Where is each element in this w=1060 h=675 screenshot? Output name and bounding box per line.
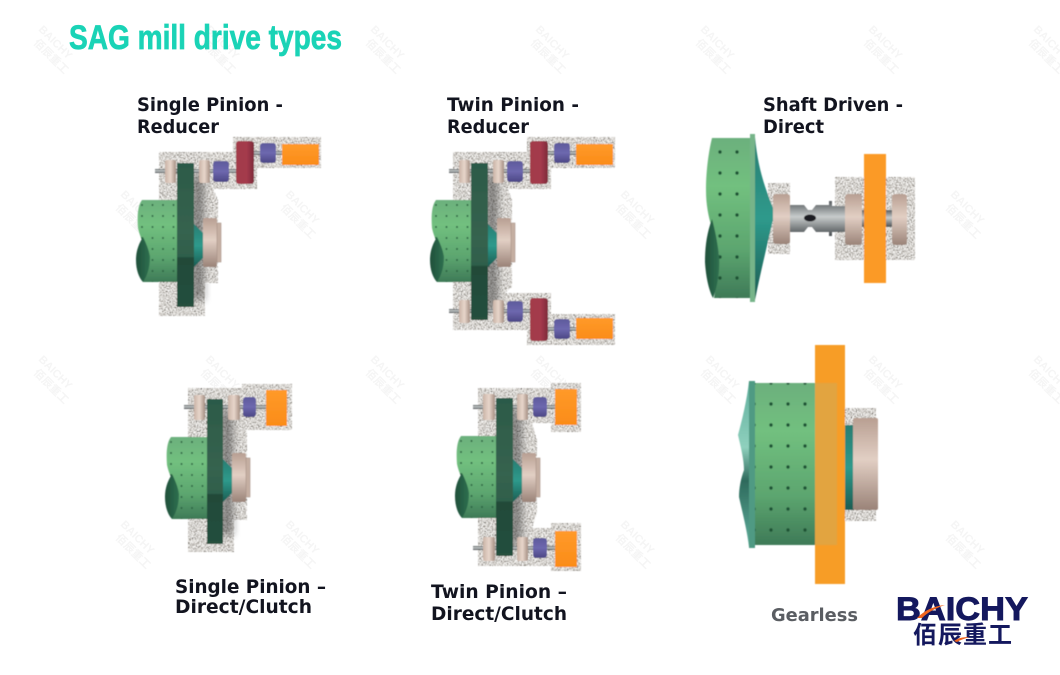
- label: twin pinion direct clutch: Direct/Clutch: [431, 603, 567, 625]
- watermark pattern: 佰辰重工: [613, 201, 654, 242]
- ring gear: [471, 163, 488, 320]
- pinion shaft: [184, 405, 268, 409]
- label: single pinion direct clutch: Single Pinion –: [175, 576, 326, 598]
- gear shadow: [221, 410, 233, 535]
- flange: [749, 381, 755, 548]
- concrete under bearing: [768, 183, 790, 254]
- pinion bearing left: [165, 160, 176, 183]
- logo chinese name: 佰辰重工: [913, 615, 1012, 650]
- mill shell: [706, 138, 750, 298]
- motor shaft: [250, 151, 284, 155]
- watermark pattern: 佰辰重工: [113, 531, 154, 572]
- label: gearless: Gearless: [771, 606, 858, 626]
- watermark pattern: BAICHY: [866, 24, 904, 62]
- trunnion and main bearing: [223, 453, 250, 502]
- coupling: [243, 397, 256, 417]
- watermark pattern: BAICHY: [36, 24, 74, 62]
- upper bearings: [459, 160, 504, 183]
- coupling: [213, 161, 229, 182]
- shell bolts: [755, 383, 838, 545]
- label: shaft driven direct: Direct: [763, 116, 824, 138]
- watermark pattern: BAICHY: [368, 354, 406, 392]
- watermark pattern: BAICHY: [203, 354, 241, 392]
- trunnion and main bearing: [194, 218, 221, 267]
- watermark pattern: BAICHY: [866, 354, 904, 392]
- motor shaft: [846, 210, 902, 227]
- label: twin pinion direct clutch: [431, 581, 567, 625]
- pinion shaft: [155, 169, 250, 173]
- lower motor shaft: [544, 327, 578, 331]
- lower pinion shaft: [473, 546, 557, 550]
- watermark pattern: 佰辰重工: [31, 366, 72, 407]
- upper motor: [555, 389, 577, 425]
- motor stator: [815, 345, 845, 584]
- shell bolts: [706, 138, 750, 298]
- watermark pattern: BAICHY: [948, 189, 986, 227]
- watermark pattern: 佰辰重工: [528, 36, 569, 77]
- concrete under motor: [835, 177, 915, 260]
- diagram: gearless: [738, 345, 878, 584]
- watermark pattern: 佰辰重工: [861, 36, 902, 77]
- coupling 2: [260, 143, 276, 163]
- diagram: shaft driven direct: [705, 134, 915, 302]
- lower bearings: [459, 300, 504, 323]
- label: twin pinion direct clutch: Twin Pinion –: [431, 581, 567, 603]
- watermark pattern: BAICHY: [698, 24, 736, 62]
- lower motor: [555, 531, 577, 567]
- diagram: single pinion direct clutch: [165, 384, 292, 552]
- label: single pinion reducer: [137, 94, 283, 138]
- couplings: [533, 397, 547, 558]
- label: shaft driven direct: [763, 94, 903, 138]
- watermark pattern: 佰辰重工: [278, 201, 319, 242]
- ring gear: [207, 399, 223, 544]
- upper pinion shaft: [449, 169, 544, 173]
- watermark pattern: BAICHY: [283, 189, 321, 227]
- watermark pattern: BAICHY: [118, 189, 156, 227]
- concrete foundation: [453, 137, 615, 345]
- motor: [266, 390, 287, 426]
- upper couplings: [507, 143, 570, 182]
- watermark pattern: 佰辰重工: [31, 36, 72, 77]
- label: single pinion direct clutch: Direct/Clutch: [175, 596, 312, 618]
- motor bearing right: [892, 194, 907, 245]
- concrete foundation: [188, 384, 292, 552]
- logo small swoosh: [954, 637, 969, 642]
- mill shell: [165, 437, 207, 519]
- watermark pattern: BAICHY: [533, 354, 571, 392]
- lower reducer: [530, 298, 548, 341]
- drive shaft: [790, 201, 846, 236]
- watermark pattern: 佰辰重工: [363, 36, 404, 77]
- flange: [750, 134, 755, 302]
- logo: Baichy: [896, 591, 1028, 650]
- mill shell: [455, 436, 497, 518]
- watermark pattern: 佰辰重工: [198, 366, 239, 407]
- concrete foundation: [159, 137, 321, 316]
- watermark pattern: BAICHY: [36, 354, 74, 392]
- watermark pattern: BAICHY: [618, 189, 656, 227]
- watermark pattern: 佰辰重工: [693, 36, 734, 77]
- pinion bearings: [194, 395, 240, 420]
- shell opening: [705, 219, 719, 298]
- gear shadow: [192, 175, 204, 300]
- logo wordmark: BAICHY: [896, 591, 1028, 627]
- diagram: twin pinion reducer: [430, 137, 615, 345]
- upper motor shaft: [544, 151, 578, 155]
- upper reducer: [530, 141, 548, 184]
- diagram: twin pinion direct clutch: [455, 383, 581, 571]
- watermark pattern: BAICHY: [703, 354, 741, 392]
- ring gear: [496, 398, 513, 556]
- reducer: [236, 141, 254, 184]
- mill shell: [136, 200, 178, 282]
- main bearing: [853, 418, 878, 510]
- lower couplings: [507, 301, 570, 339]
- watermark pattern: 佰辰重工: [943, 531, 984, 572]
- label: twin pinion reducer: Reducer: [447, 116, 530, 138]
- watermark pattern: 佰辰重工: [943, 201, 984, 242]
- watermark pattern: 佰辰重工: [861, 366, 902, 407]
- lower motor: [576, 318, 613, 339]
- watermark pattern: [27, 24, 1060, 572]
- trunnion and main bearing: [488, 218, 515, 267]
- label: twin pinion reducer: Twin Pinion -: [447, 94, 579, 116]
- trunnion and main bearing: [513, 453, 540, 502]
- watermark pattern: 佰辰重工: [113, 201, 154, 242]
- lower bearings: [483, 537, 528, 561]
- concrete foundation: [478, 383, 581, 571]
- watermark pattern: 佰辰重工: [363, 366, 404, 407]
- feed cone: [755, 137, 773, 300]
- watermark pattern: 佰辰重工: [198, 36, 239, 77]
- gear shadow: [510, 410, 522, 545]
- watermark pattern: BAICHY: [533, 24, 571, 62]
- feed head: [738, 381, 749, 547]
- pinion bearing right: [199, 160, 210, 183]
- upper bearings: [483, 394, 528, 420]
- concrete foundation: [845, 408, 876, 521]
- motor: [864, 154, 886, 283]
- motor bearing left: [845, 194, 862, 245]
- watermark pattern: 佰辰重工: [278, 531, 319, 572]
- shaft hole: [804, 214, 816, 222]
- ring gear: [177, 163, 194, 307]
- watermark pattern: BAICHY: [203, 24, 241, 62]
- mill shell: [430, 200, 472, 282]
- label: single pinion direct clutch: [175, 576, 326, 618]
- watermark pattern: 佰辰重工: [613, 531, 654, 572]
- title: SAG mill drive types: [69, 19, 342, 57]
- watermark pattern: BAICHY: [283, 519, 321, 557]
- upper motor: [576, 144, 613, 165]
- motor: [282, 144, 319, 165]
- label: single pinion reducer: Single Pinion -: [137, 94, 283, 116]
- watermark pattern: 佰辰重工: [698, 366, 739, 407]
- watermark pattern: BAICHY: [618, 519, 656, 557]
- main bearing: [773, 194, 790, 244]
- mill shell: [755, 383, 838, 545]
- label: shaft driven direct: Shaft Driven -: [763, 94, 903, 116]
- gear shadow: [486, 175, 498, 310]
- label: twin pinion reducer: [447, 94, 579, 138]
- trunnion: [845, 425, 854, 510]
- watermark pattern: 佰辰重工: [528, 366, 569, 407]
- watermark pattern: BAICHY: [948, 519, 986, 557]
- diagram: single pinion reducer: [136, 137, 321, 316]
- watermark pattern: BAICHY: [118, 519, 156, 557]
- shell seen through stator: [815, 383, 837, 545]
- lower pinion shaft: [449, 309, 544, 313]
- watermark pattern: BAICHY: [368, 24, 406, 62]
- logo swoosh: [917, 605, 945, 618]
- label: single pinion reducer: Reducer: [137, 116, 220, 138]
- upper pinion shaft: [473, 405, 557, 409]
